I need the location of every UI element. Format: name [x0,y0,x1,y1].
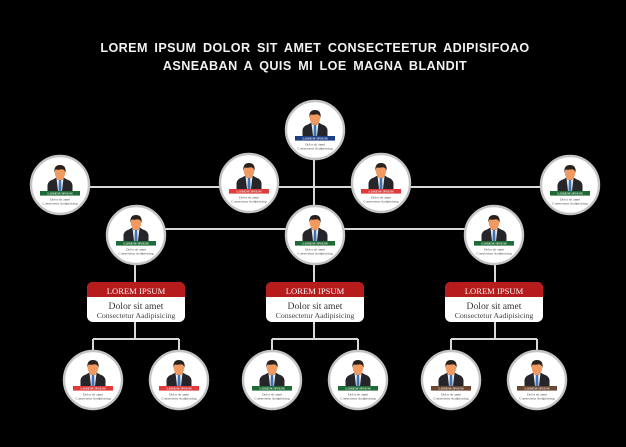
node: bottom 2: LOREM IPSUM [166,387,192,391]
node: inner left red: Consectetur Aadipisicing [231,200,267,204]
node: bottom 3: LOREM IPSUM [259,387,285,391]
title: LOREM IPSUM DOLOR SIT AMET CONSECTEETUR ADIPISIFOAO [100,41,530,55]
node: bottom 2: Dolor sit amet [169,392,189,396]
node: row three centre: LOREM IPSUM [302,242,328,246]
node: bottom 6: Dolor sit amet [527,392,547,396]
node: bottom 5: Dolor sit amet [441,392,461,396]
connector lines [88,158,542,352]
card: left department [87,282,185,322]
node: top executive: Dolor sit amet [305,142,325,146]
title: ASNEABAN A QUIS MI LOE MAGNA BLANDIT [163,59,467,73]
node: inner left red: LOREM IPSUM [236,190,262,194]
node: far right green [541,156,599,214]
node: far left green: Dolor sit amet [50,198,70,202]
card: right department: Dolor sit amet [467,301,522,312]
node: bottom 6 [508,351,566,409]
node: inner right red: Dolor sit amet [371,196,391,200]
node: bottom 2: Consectetur Aadipisicing [161,396,197,400]
node: row three centre: Consectetur Aadipisicing [297,252,333,256]
card: right department: Consectetur Aadipisicing [455,311,533,320]
card: centre department [266,282,364,322]
node: top executive: Consectetur Aadipisicing [297,146,333,150]
node: bottom 1: LOREM IPSUM [80,387,106,391]
node: row three right: Consectetur Aadipisicing [476,252,512,256]
node: row three left: Consectetur Aadipisicing [118,252,154,256]
node: inner right red: Consectetur Aadipisicing [363,200,399,204]
card: left department: Dolor sit amet [109,301,164,312]
node: bottom 6: LOREM IPSUM [524,387,550,391]
node: bottom 6: Consectetur Aadipisicing [519,396,555,400]
node: bottom 1 [64,351,122,409]
card: centre department: Dolor sit amet [288,301,343,312]
node: inner left red [220,154,278,212]
node: bottom 4: Dolor sit amet [348,392,368,396]
node: far right green: LOREM IPSUM [557,192,583,196]
node: bottom 4: Consectetur Aadipisicing [340,396,376,400]
node: bottom 4: LOREM IPSUM [345,387,371,391]
node: row three right [465,206,523,264]
node: bottom 3: Consectetur Aadipisicing [254,396,290,400]
card: right department: LOREM IPSUM [465,286,524,296]
node: bottom 5 [422,351,480,409]
node: bottom 3 [243,351,301,409]
card: centre department: Consectetur Aadipisicing [276,311,354,320]
node: far left green: LOREM IPSUM [47,192,73,196]
node: far right green: Consectetur Aadipisicing [552,202,588,206]
title [100,41,530,73]
node: row three centre [286,206,344,264]
node: bottom 4 [329,351,387,409]
node: bottom 5: Consectetur Aadipisicing [433,396,469,400]
node: bottom 2 [150,351,208,409]
card: centre department: LOREM IPSUM [286,286,345,296]
node: row three centre: Dolor sit amet [305,248,325,252]
node: bottom 1: Consectetur Aadipisicing [75,396,111,400]
card: right department [445,282,543,322]
node: far left green: Consectetur Aadipisicing [42,202,78,206]
node: row three right: Dolor sit amet [484,248,504,252]
node: far left green [31,156,89,214]
node: row three left: Dolor sit amet [126,248,146,252]
node: inner left red: Dolor sit amet [239,196,259,200]
card: left department: LOREM IPSUM [107,286,166,296]
node: inner right red: LOREM IPSUM [368,190,394,194]
node: row three left [107,206,165,264]
node: top executive: LOREM IPSUM [302,137,328,141]
node: row three right: LOREM IPSUM [481,242,507,246]
node: far right green: Dolor sit amet [560,198,580,202]
card: left department: Consectetur Aadipisicing [97,311,175,320]
node: row three left: LOREM IPSUM [123,242,149,246]
node: inner right red [352,154,410,212]
node: top executive [286,101,344,159]
node: bottom 1: Dolor sit amet [83,392,103,396]
node: bottom 5: LOREM IPSUM [438,387,464,391]
node: bottom 3: Dolor sit amet [262,392,282,396]
